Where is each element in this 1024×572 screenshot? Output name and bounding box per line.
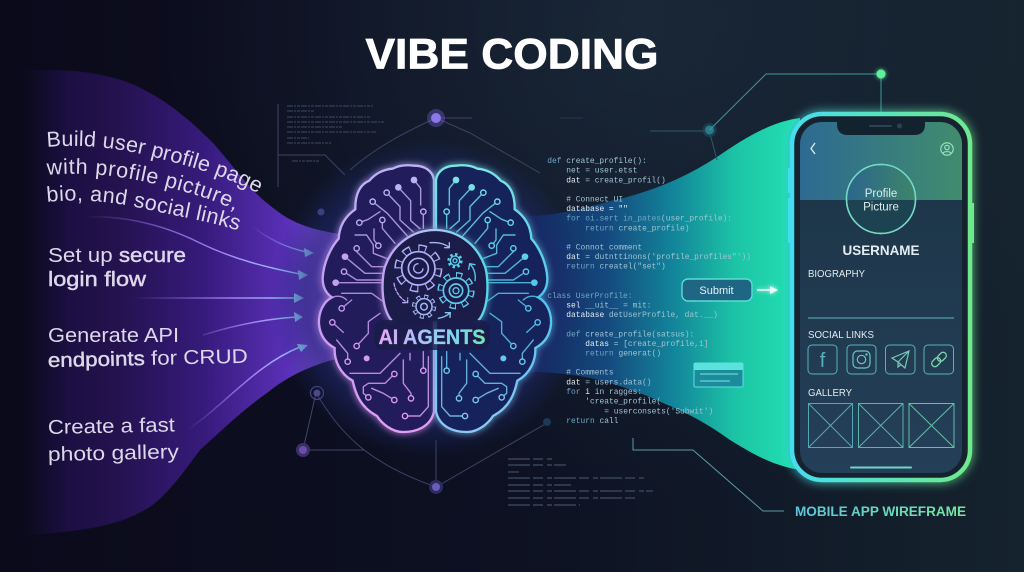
account icon <box>941 143 953 155</box>
prompt: build user profile page <box>46 130 261 230</box>
central circle <box>383 230 487 321</box>
generated code: database detUserProfile, dat.__) <box>566 311 718 320</box>
social links: f <box>820 350 826 372</box>
prompt: photo gallery: photo gallery <box>48 441 179 466</box>
prompt: photo gallery <box>48 414 179 466</box>
generated code: return generat() <box>585 350 661 359</box>
window icon <box>694 363 743 387</box>
profile picture <box>846 164 916 234</box>
gear: bottom <box>414 297 434 316</box>
prompt: generate API endpoints: Generate API <box>48 325 179 347</box>
submit button <box>682 279 752 301</box>
background circuit lines <box>278 104 717 487</box>
purple input flow <box>0 70 340 537</box>
faint code block top left <box>287 106 384 161</box>
generated code <box>547 157 751 426</box>
prompt: build user profile page: Build user profile page <box>48 130 261 192</box>
back icon <box>811 143 815 154</box>
generated code: # Connot comment <box>566 243 642 252</box>
generated code: return call <box>566 417 619 426</box>
brain glow <box>270 138 590 458</box>
right lobe <box>436 165 551 432</box>
network nodes <box>296 109 716 494</box>
side buttons <box>789 168 973 243</box>
gear: large right <box>441 275 471 306</box>
prompt: secure login flow <box>48 245 186 291</box>
phone frame <box>792 114 970 480</box>
generated code: return create_profile) <box>585 224 689 233</box>
prompt: secure login flow: login flow <box>48 269 147 291</box>
generated code: dat = users.data() <box>566 378 652 387</box>
prompt: secure login flow: Set up secure <box>48 245 186 267</box>
notch <box>837 121 925 135</box>
profile picture: Profile <box>865 188 897 200</box>
biography: BIOGRAPHY <box>808 268 865 280</box>
social links <box>808 329 954 374</box>
generated code: dat = dutnttinons('profile_profiles"')) <box>566 253 751 262</box>
generated code: def create_profile(): <box>547 157 647 166</box>
prompt: build user profile page: bio, and social links <box>47 185 240 230</box>
faint code block bottom <box>508 459 653 505</box>
teal output flow <box>525 118 800 470</box>
brain <box>319 165 551 432</box>
prompt: generate API endpoints: endpoints for CRUD <box>48 346 248 372</box>
generated code: def create_profile(satsus): <box>566 330 694 339</box>
screen header <box>800 122 962 200</box>
wireframe callout: MOBILE APP WIREFRAME <box>795 504 966 519</box>
AI AGENTS label: AI AGENTS <box>378 326 486 349</box>
profile picture: Picture <box>863 202 899 214</box>
title: VIBE CODING <box>366 30 658 78</box>
generated code: # Comments <box>566 369 614 378</box>
generated code: datas = [create_profile,1] <box>585 340 708 349</box>
arrow to phone <box>757 286 778 294</box>
speaker and camera <box>870 124 902 128</box>
generated code: = userconsets('Subwit') <box>604 407 713 416</box>
social links: SOCIAL LINKS <box>808 329 874 341</box>
generated code: net = user.etst <box>566 167 637 176</box>
left lobe <box>319 165 434 432</box>
generated code: for i in ragges: <box>566 388 642 397</box>
gear: large left <box>398 248 438 288</box>
generated code: sel __uit__ = mit: <box>566 301 652 310</box>
generated code: database = "" <box>566 205 628 214</box>
rotation arrows <box>394 243 475 318</box>
username: USERNAME <box>842 242 920 258</box>
phone wireframe <box>789 114 973 480</box>
generated code: # Connect UI <box>566 196 623 205</box>
prompt: photo gallery: Create a fast <box>48 414 176 439</box>
generated code: dat = create_profil() <box>566 176 666 185</box>
generated code: 'create_profile( <box>585 398 661 407</box>
submit button: Submit <box>699 285 734 297</box>
arrows into brain <box>83 217 314 430</box>
connector to phone top <box>710 70 886 130</box>
generated code: class UserProfile: <box>547 292 633 301</box>
prompt: build user profile page: with profile picture, <box>46 158 234 212</box>
generated code: for oi.sert in_pates(user_profile): <box>566 215 732 224</box>
gear: small <box>449 255 461 266</box>
home indicator <box>851 466 911 468</box>
generated code: return createl("set") <box>566 263 666 272</box>
prompt: generate API endpoints <box>48 325 248 372</box>
wireframe callout <box>633 438 966 519</box>
gallery <box>808 387 954 448</box>
screen <box>800 122 962 473</box>
gallery: GALLERY <box>808 387 852 399</box>
